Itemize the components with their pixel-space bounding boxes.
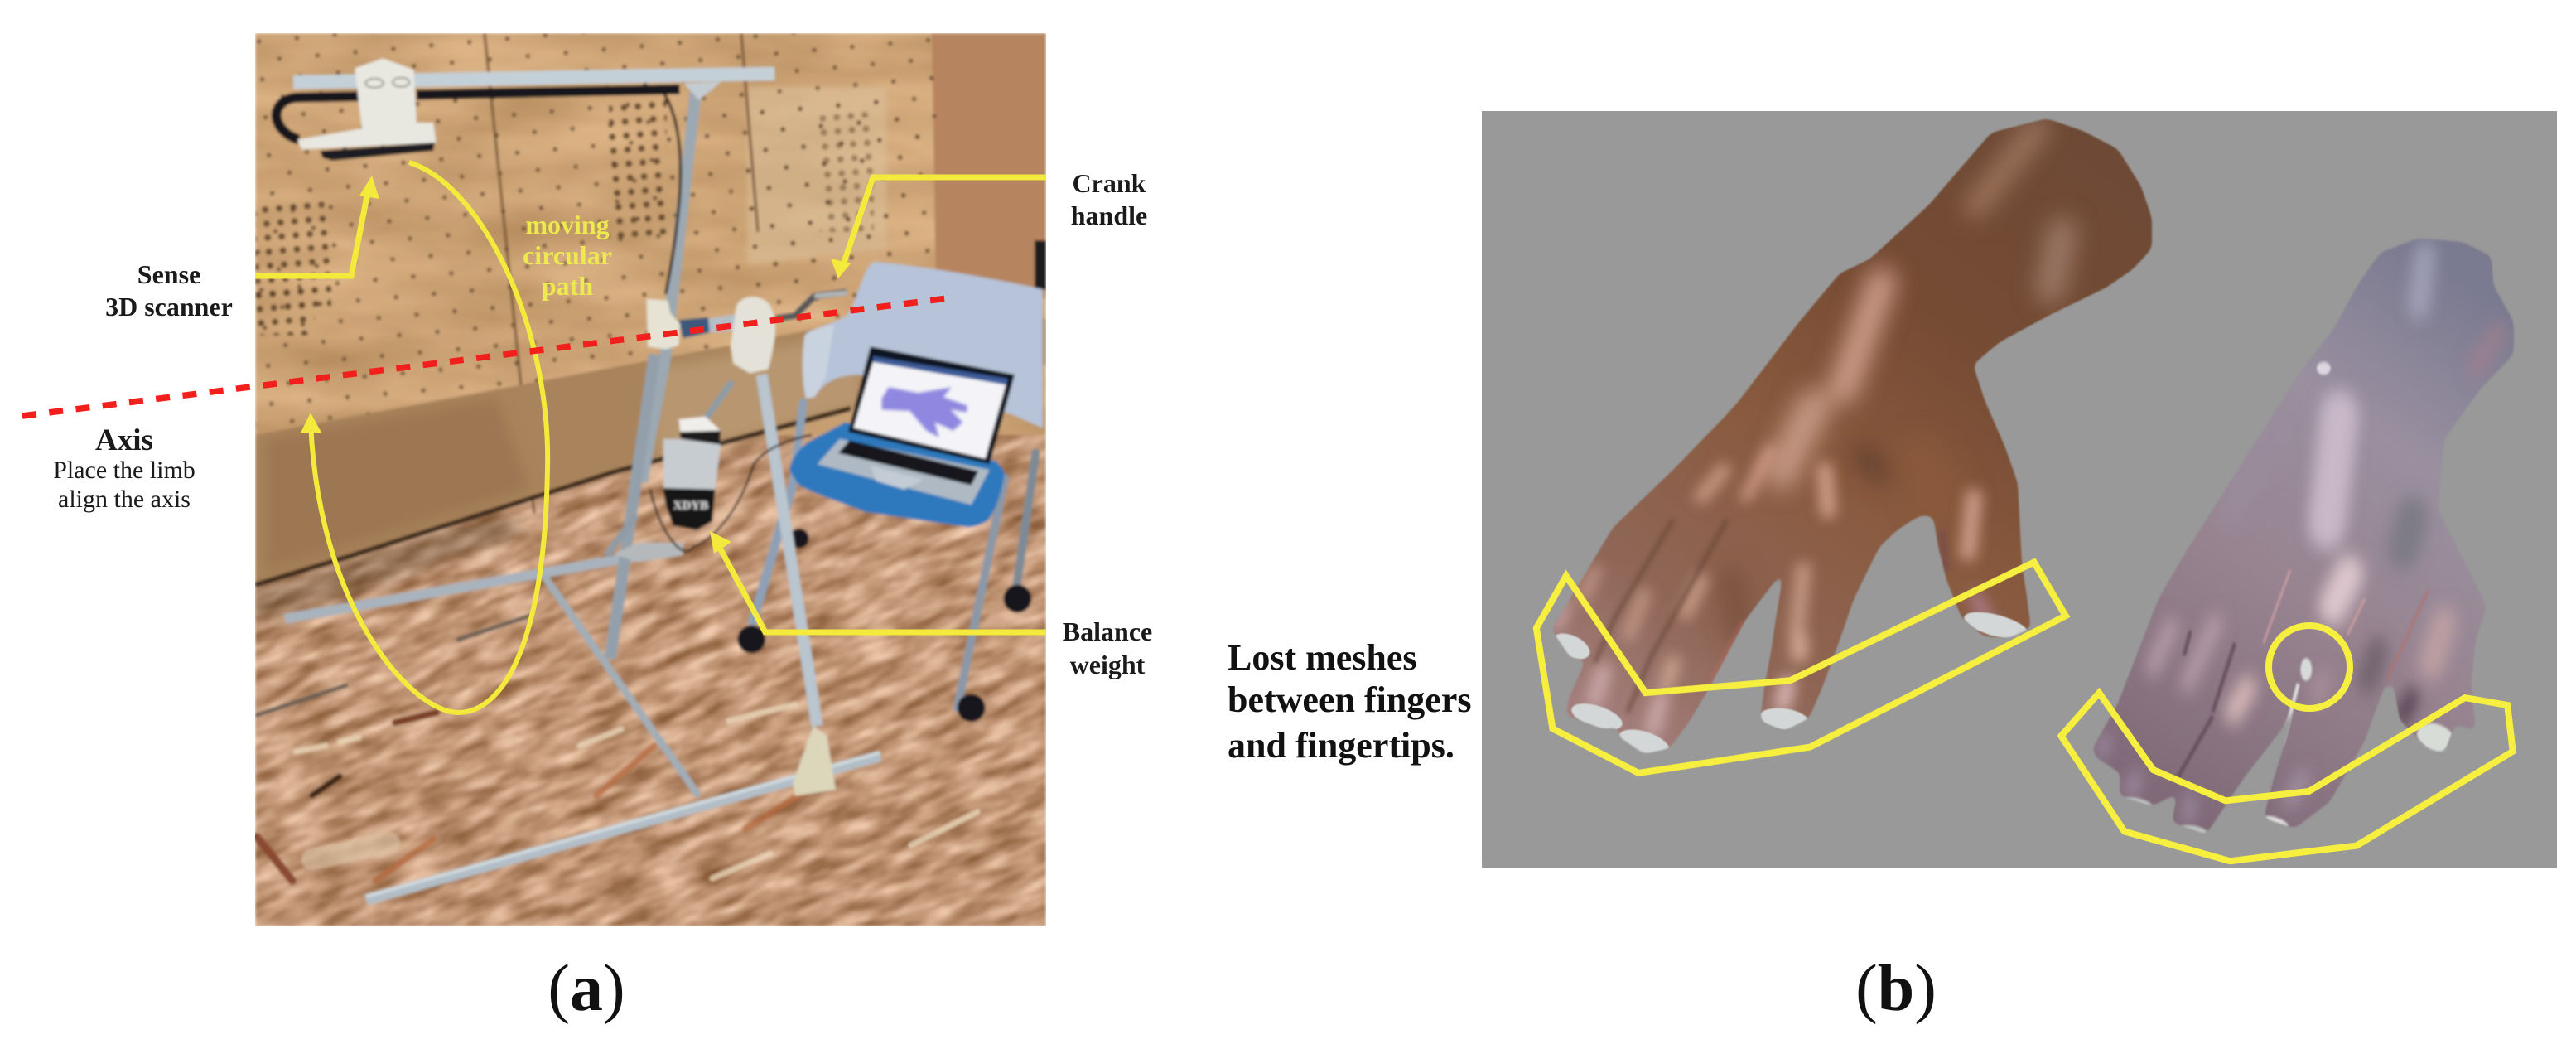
caption b: (b) (1855, 952, 1937, 1025)
panel b: scanned hands on gray (1482, 99, 2557, 868)
arrowhead: balance weight (710, 531, 731, 554)
screen hand (881, 387, 967, 437)
arrow: moving circular path (311, 162, 548, 713)
label: axis (53, 423, 195, 513)
weight box label: XDYB (673, 499, 708, 512)
axis dashed line (22, 297, 954, 416)
arrowhead: scanner (359, 176, 379, 199)
photo content (255, 33, 1046, 926)
crank assembly and balance weight (613, 292, 847, 563)
panel a: photo of scanning rig (255, 33, 1056, 926)
chair seat (789, 423, 1005, 527)
chair shell (803, 262, 1043, 428)
yellow outline: left hand fingertips (1536, 563, 2066, 773)
left hand soft shading (1731, 128, 2062, 630)
rig base (285, 549, 880, 900)
label: balance weight: Balance (1063, 616, 1152, 646)
arrow: crank callout (842, 177, 1056, 269)
label: balance weight: weight (1070, 650, 1146, 679)
label: axis: Place the limb (53, 457, 195, 484)
floor (255, 433, 1046, 926)
label: lost meshes: Lost meshes (1228, 637, 1417, 678)
label: lost meshes: between fingers (1228, 679, 1471, 720)
left hand fingertip lost meshes (1549, 607, 2031, 762)
cable (650, 435, 812, 551)
chair (737, 262, 1043, 722)
label: moving circular path: circular (523, 240, 612, 270)
label: moving circular path: path (542, 271, 593, 301)
label: lost meshes: and fingertips. (1228, 725, 1454, 766)
label: sense 3D scanner: 3D scanner (105, 292, 233, 321)
caption a: (a) (548, 952, 625, 1025)
laptop (818, 346, 1015, 505)
arrowhead: crank (831, 259, 851, 278)
label: crank handle (1071, 168, 1147, 230)
wall upper pegboard (255, 33, 1046, 514)
label: lost meshes (1228, 637, 1471, 766)
rig uprights (606, 82, 818, 726)
wall lower panel (255, 319, 1046, 621)
yellow circle: lost mesh between fingers (2269, 626, 2350, 708)
label: crank handle: handle (1071, 201, 1147, 230)
gray background (1482, 111, 2557, 868)
arrowhead: circular path (301, 413, 321, 433)
label: balance weight (1063, 616, 1152, 679)
label: axis: align the axis (58, 486, 191, 513)
label: sense 3D scanner (105, 259, 233, 321)
scanner rail and carriage (277, 59, 774, 161)
arrow: balance weight callout (716, 540, 1046, 632)
label: sense 3D scanner: Sense (137, 259, 200, 289)
label: axis: Axis (95, 423, 153, 457)
label: moving circular path: moving (525, 210, 610, 239)
left brown hand (1532, 99, 2178, 779)
yellow outline: right hand fingertips (2061, 693, 2513, 861)
label: moving circular path (523, 210, 612, 301)
right purple-gray hand (2073, 224, 2530, 850)
label: crank handle: Crank (1073, 168, 1146, 198)
chair legs (737, 403, 1035, 722)
right hand soft shading (2101, 256, 2498, 816)
right hand fingertips (2120, 718, 2458, 839)
arrow: scanner callout (255, 184, 369, 276)
